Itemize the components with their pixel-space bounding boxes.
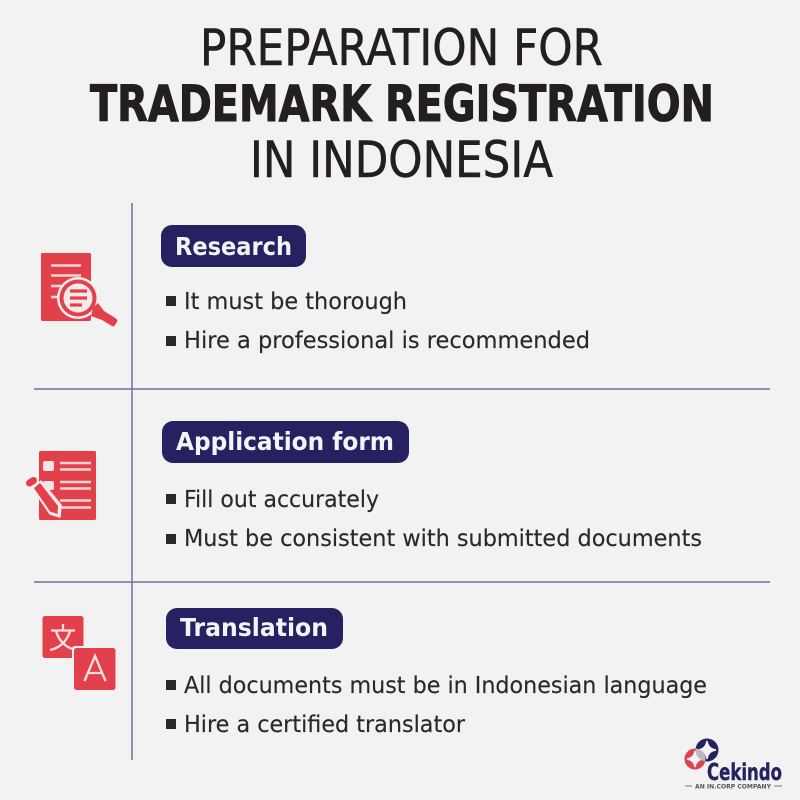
icon: translation (42, 616, 117, 692)
panel: translation (166, 608, 707, 738)
list: research points: Hire a professional is recommended (184, 326, 590, 354)
title (90, 19, 714, 189)
heading: application form: Application form (176, 427, 394, 456)
list: research points (166, 287, 590, 354)
logo mark (684, 738, 718, 770)
list: translation points (166, 671, 707, 738)
heading: application form (162, 421, 409, 463)
heading: translation: Translation (180, 613, 328, 642)
heading: research: Research (175, 232, 292, 261)
icon: document with magnifier (41, 253, 117, 326)
list: translation points: All documents must be in Indonesian language (184, 671, 707, 699)
logo: Cekindo: AN IN.CORP COMPANY (695, 784, 772, 790)
heading: research (161, 225, 306, 267)
logo: Cekindo (684, 738, 782, 790)
list: application points: Must be consistent with submitted documents (184, 524, 702, 552)
panel: application form (162, 421, 702, 552)
list: translation points: Hire a certified translator (184, 710, 465, 738)
panel: research (161, 225, 590, 354)
title: IN INDONESIA (250, 131, 553, 189)
title: PREPARATION FOR (200, 19, 603, 77)
list: application points (166, 485, 702, 552)
heading: translation (166, 608, 343, 649)
list: application points: Fill out accurately (184, 485, 379, 513)
list: research points: It must be thorough (184, 287, 407, 315)
icon: form with pencil (30, 451, 96, 520)
